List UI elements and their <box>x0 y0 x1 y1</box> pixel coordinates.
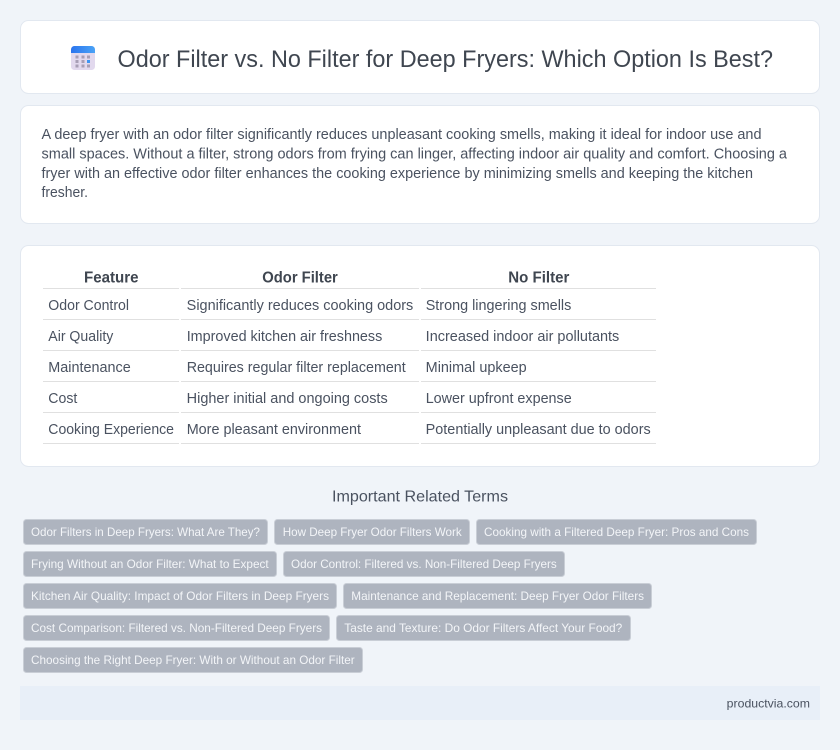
tag <box>476 520 756 544</box>
table row: cooking experience: Cooking Experience <box>48 422 174 438</box>
tag <box>284 552 564 576</box>
table header row: No Filter <box>508 270 569 287</box>
table header row: Odor Filter <box>262 270 338 287</box>
tag: Kitchen Air Quality: Impact of Odor Filters in Deep Fryers <box>31 589 329 603</box>
footer bar <box>20 686 820 720</box>
tag <box>24 616 330 640</box>
footer source text: productvia.com <box>727 696 810 710</box>
tag <box>24 584 336 608</box>
table row: cost: Higher initial and ongoing costs <box>187 391 388 407</box>
text block: introduction paragraph: fresher. <box>42 185 88 201</box>
table row: cost: Lower upfront expense <box>426 391 572 407</box>
tag list: related terms <box>24 520 756 672</box>
tag <box>24 552 276 576</box>
table row: odor control: Significantly reduces cooking odors <box>187 298 413 314</box>
tag: Cost Comparison: Filtered vs. Non-Filtered Deep Fryers <box>31 621 322 635</box>
table row: maintenance <box>48 360 527 376</box>
table row: air quality: Air Quality <box>48 329 114 345</box>
panel: comparison table <box>20 246 820 466</box>
table row: odor control <box>48 298 571 314</box>
tag: Taste and Texture: Do Odor Filters Affect Your Food? <box>344 621 623 635</box>
tag: Frying Without an Odor Filter: What to Expect <box>31 557 269 571</box>
table row: cost <box>48 391 572 407</box>
tag: Maintenance and Replacement: Deep Fryer Odor Filters <box>351 589 644 603</box>
table row: cost: Cost <box>48 391 77 407</box>
table row: cooking experience: More pleasant environment <box>187 422 361 438</box>
text block: introduction paragraph: A deep fryer with an odor filter significantly reduces unpleasant cooking smells, making it ideal for indoor use and <box>42 127 762 143</box>
table row: maintenance: Requires regular filter replacement <box>187 360 406 376</box>
heading: related terms: Important Related Terms <box>332 489 508 506</box>
tag <box>274 520 470 544</box>
table row: air quality: Increased indoor air pollutants <box>426 329 619 345</box>
tag: How Deep Fryer Odor Filters Work <box>283 525 463 539</box>
tag <box>24 648 362 672</box>
table row: maintenance: Maintenance <box>48 360 131 376</box>
tag: Choosing the Right Deep Fryer: With or Without an Odor Filter <box>31 653 355 667</box>
table row: odor control: Odor Control <box>48 298 129 314</box>
table row: cooking experience <box>48 422 651 438</box>
tag <box>24 520 268 544</box>
table row: cooking experience: Potentially unpleasant due to odors <box>426 422 651 438</box>
table row: odor control: Strong lingering smells <box>426 298 571 314</box>
tag: Odor Control: Filtered vs. Non-Filtered Deep Fryers <box>291 557 557 571</box>
tag: Cooking with a Filtered Deep Fryer: Pros and Cons <box>484 525 749 539</box>
panel: header <box>20 20 820 94</box>
table row: maintenance: Minimal upkeep <box>426 360 527 376</box>
icon: calendar <box>71 46 95 70</box>
table row: air quality: Improved kitchen air freshness <box>187 329 382 345</box>
tag <box>344 584 652 608</box>
title: Odor Filter vs. No Filter for Deep Fryers: Which Option Is Best? <box>118 46 773 73</box>
text block: introduction paragraph: fryer with an effective odor filter enhances the cooking experience by minimizing smells and keeping the kitchen <box>42 166 753 182</box>
table header row: Feature <box>84 270 139 287</box>
table header row <box>84 270 569 287</box>
text block: introduction paragraph <box>42 127 787 201</box>
text block: introduction paragraph: small spaces. Without a filter, strong odors from frying can linger, affecting indoor air quality and comfort. Choosing a <box>42 146 787 162</box>
tag <box>336 616 630 640</box>
panel: introduction <box>20 106 820 224</box>
table row: air quality <box>48 329 619 345</box>
tag: Odor Filters in Deep Fryers: What Are They? <box>31 525 260 539</box>
